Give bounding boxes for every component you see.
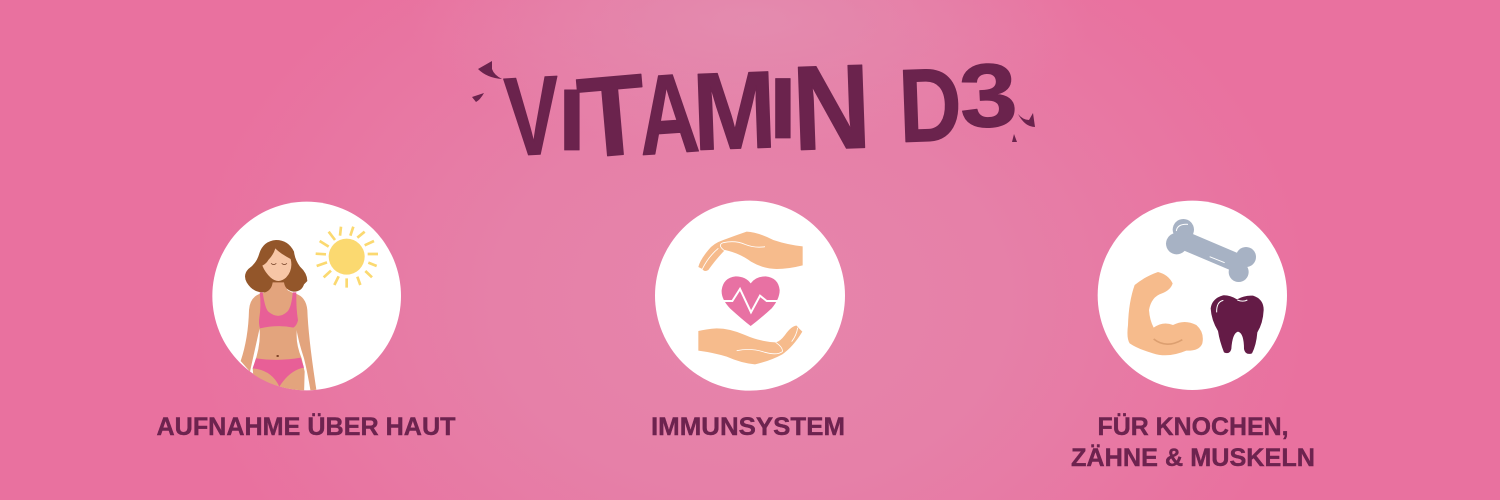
- title: Vitamin D3: I: [769, 61, 797, 156]
- title: Vitamin D3: T: [573, 50, 651, 182]
- face: [262, 248, 291, 281]
- icon: heart with pulse: [722, 276, 780, 326]
- icon: woman: [241, 240, 317, 395]
- icon: flexed arm: [1127, 272, 1203, 355]
- panel: Aufnahme über Haut: [156, 202, 455, 441]
- title: Vitamin D3: A: [634, 50, 703, 180]
- title accent marks: [472, 61, 1035, 142]
- right arm: [295, 294, 317, 392]
- label: Immunsystem: IMMUNSYSTEM: [651, 413, 845, 441]
- title: Vitamin D3: D: [897, 47, 964, 165]
- icon: tooth: [1211, 295, 1264, 354]
- icon: sun: [316, 227, 378, 288]
- label: Für Knochen, Zähne & Muskeln: ZÄHNE & MUSKELN: [1071, 444, 1315, 472]
- title: Vitamin D3: 3: [957, 44, 1020, 147]
- panel: Immunsystem: [651, 201, 845, 441]
- title: Vitamin D3: I: [558, 71, 586, 169]
- title: Vitamin D3: M: [691, 49, 778, 174]
- icon: upper hand: [698, 232, 803, 271]
- icon circle: hands and heart: [655, 201, 845, 391]
- label: Aufnahme über Haut: AUFNAHME ÜBER HAUT: [156, 412, 455, 441]
- label: Für Knochen, Zähne & Muskeln: [1071, 412, 1315, 472]
- title: Vitamin D3: V: [502, 52, 563, 180]
- icon: bone: [1166, 219, 1256, 282]
- hair: [245, 240, 307, 292]
- icon circle: bone, arm and tooth: [1098, 201, 1287, 390]
- bikini bottom: [253, 358, 304, 387]
- bikini top: [259, 292, 298, 328]
- panel: Für Knochen, Zähne & Muskeln: [1071, 201, 1315, 472]
- icon circle: woman: [212, 202, 401, 395]
- icon: lower hand: [698, 326, 802, 364]
- title: Vitamin D3: N: [790, 40, 873, 176]
- title: Vitamin D3: [502, 40, 1020, 182]
- label: Für Knochen, Zähne & Muskeln: FÜR KNOCHEN,: [1098, 412, 1288, 441]
- torso and legs: [253, 278, 305, 395]
- left arm: [241, 294, 261, 372]
